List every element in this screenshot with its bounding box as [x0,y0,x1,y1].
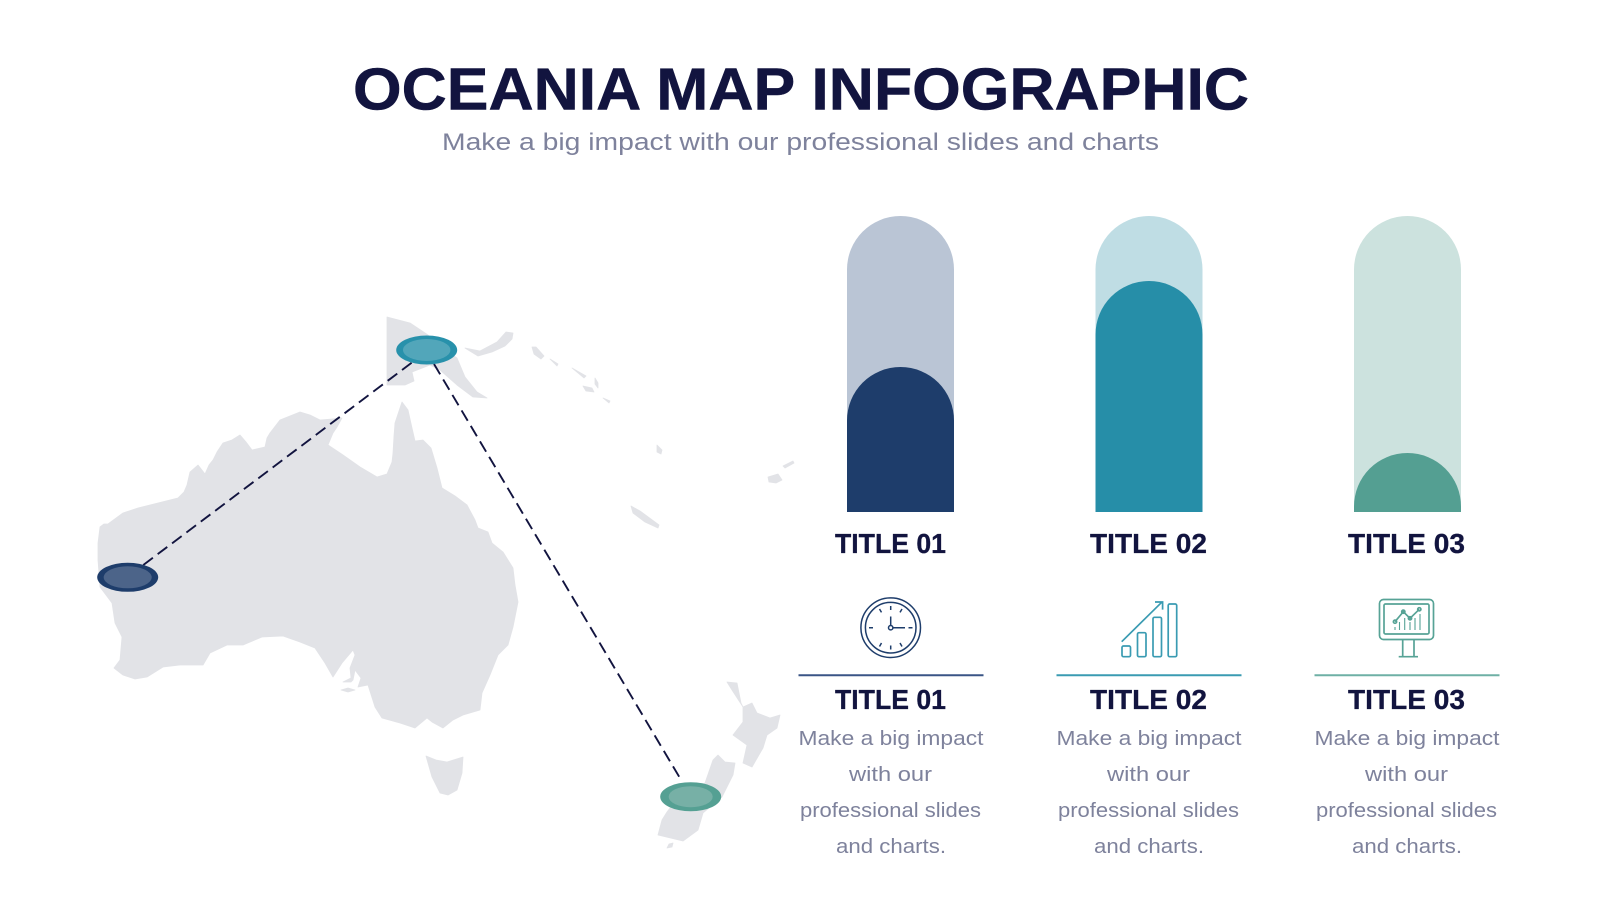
column 02 text: professional slides [1058,799,1239,822]
column 03 [1314,675,1500,858]
New Caledonia [631,506,659,528]
subtitle: Make a big impact with our professional slides and charts [442,129,1159,156]
column 03 text [1314,727,1500,858]
icon: clock [861,598,920,658]
title: OCEANIA MAP INFOGRAPHIC [353,56,1249,122]
column 01 text: Make a big impact [798,727,984,750]
Australia [98,402,518,728]
marker: Papua New Guinea [396,336,457,364]
bar label 02: TITLE 02 [1090,528,1207,559]
marker: Western Australia [97,563,158,592]
column 01 text: professional slides [800,799,981,822]
column 03 heading: TITLE 03 [1348,684,1465,715]
bar label 01: TITLE 01 [835,528,946,559]
column 02 heading: TITLE 02 [1090,684,1207,715]
column 02 text [1056,727,1242,858]
column 01 text: and charts. [836,835,946,858]
column 03 text: Make a big impact [1314,727,1500,750]
marker: New Zealand [660,782,721,811]
New Zealand South Island [658,755,735,848]
column 03 text: with our [1364,763,1448,786]
column 01 heading: TITLE 01 [835,684,946,715]
Fiji [768,461,794,483]
column 03 text: and charts. [1352,835,1462,858]
bar 01 [847,216,954,512]
map of Oceania [98,317,794,848]
bar label 03: TITLE 03 [1348,528,1465,559]
Kangaroo Island [341,688,355,692]
column 02 text: and charts. [1094,835,1204,858]
Vanuatu [657,445,662,454]
Tasmania [426,756,463,795]
New Britain [465,332,513,356]
New Zealand North Island [727,682,780,767]
column 03 text: professional slides [1316,799,1497,822]
Papua New Guinea [387,317,487,398]
column 01 text [798,727,984,858]
icon: monitor chart [1380,600,1434,657]
column 02 [1056,675,1242,858]
Solomon Islands [532,347,610,403]
column 02 text: Make a big impact [1056,727,1242,750]
bar 03 [1354,216,1461,512]
bar 02 [1096,216,1202,512]
column 02 text: with our [1106,763,1190,786]
column 01 [798,675,984,858]
icon: rising bars [1122,602,1177,657]
dashed connector: north to south-east [434,364,681,779]
column 01 text: with our [848,763,932,786]
dashed connector: west to north [143,363,412,565]
